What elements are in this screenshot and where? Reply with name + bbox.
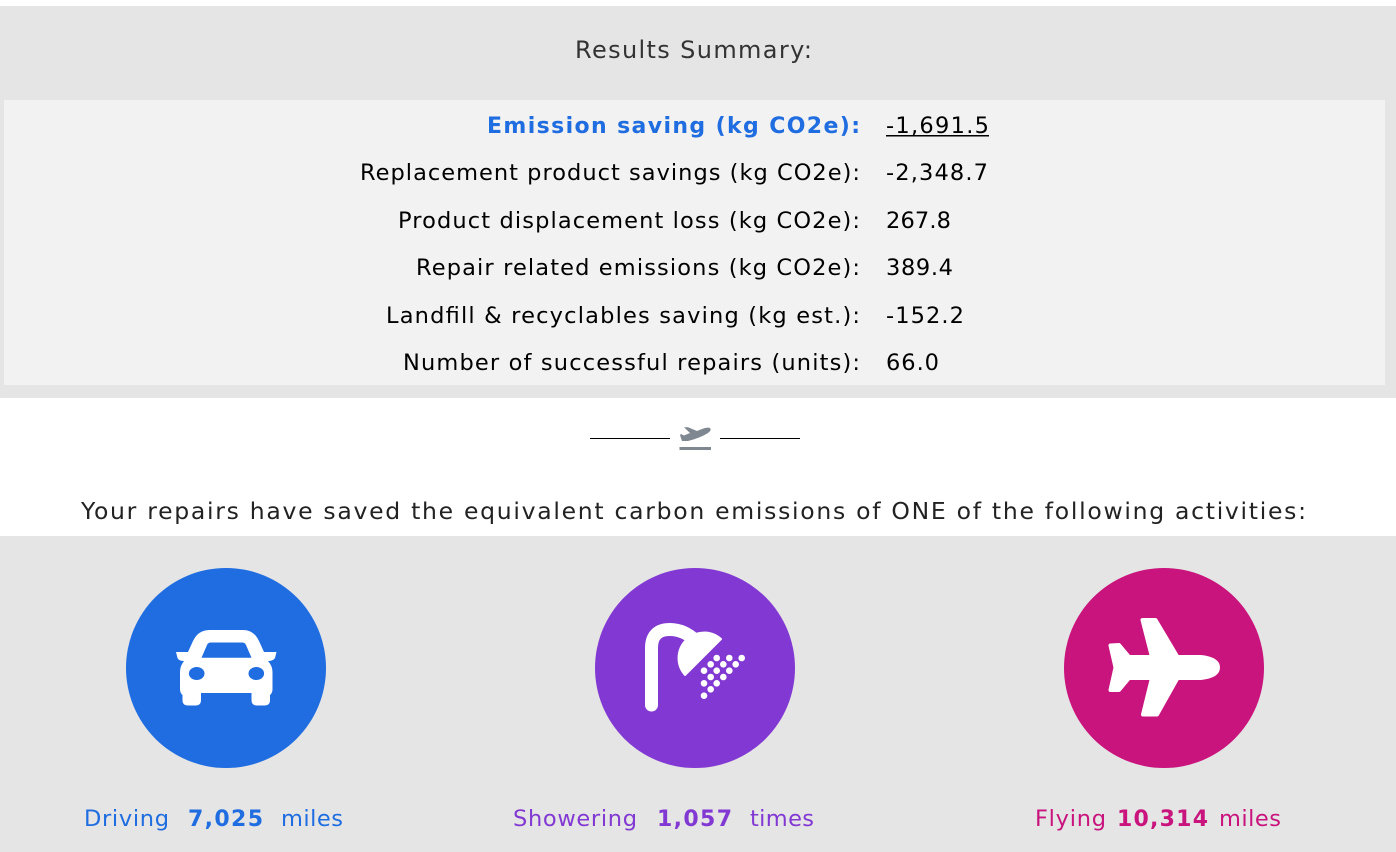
panel: equivalent activities xyxy=(0,536,1396,852)
row: emission saving: -1,691.5 xyxy=(886,113,989,139)
row: landfill and recyclables saving: -152.2 xyxy=(886,303,964,329)
panel: results table xyxy=(4,100,1385,385)
heading: results summary: Results Summary: xyxy=(575,36,812,64)
label: showering times xyxy=(513,806,814,832)
label: driving miles: miles xyxy=(281,806,343,832)
icon: car xyxy=(126,568,326,768)
row: number of successful repairs: 66.0 xyxy=(886,350,939,376)
activity: driving xyxy=(84,568,343,832)
label: driving miles: 7,025 xyxy=(188,807,263,832)
label: driving miles: Driving xyxy=(84,806,169,832)
icon: takeoff plane xyxy=(680,427,711,450)
icon: plane xyxy=(1064,568,1264,768)
label: showering times: Showering xyxy=(513,806,637,832)
row: landfill and recyclables saving: Landfill & recyclables saving (kg est.): xyxy=(386,303,860,329)
row: replacement product savings: -2,348.7 xyxy=(886,160,988,186)
text: equivalent activities intro: Your repairs have saved the equivalent carbon emissions of ONE of the following activities: xyxy=(80,497,1306,525)
label: flying miles: miles xyxy=(1219,806,1281,832)
icon: shower xyxy=(595,568,795,768)
label: flying miles: 10,314 xyxy=(1117,807,1208,832)
divider with takeoff icon xyxy=(590,427,800,450)
activity: flying xyxy=(1035,568,1281,832)
row: number of successful repairs: Number of successful repairs (units): xyxy=(403,350,860,376)
label: flying miles xyxy=(1035,806,1281,832)
row: repair related emissions: 389.4 xyxy=(886,255,953,281)
row: replacement product savings: Replacement product savings (kg CO2e): xyxy=(360,160,860,186)
row: emission saving: Emission saving (kg CO2e): xyxy=(487,114,860,139)
row: repair related emissions: Repair related emissions (kg CO2e): xyxy=(416,255,860,281)
panel: results summary xyxy=(0,6,1396,398)
label: showering times: times xyxy=(750,806,814,832)
label: flying miles: Flying xyxy=(1035,806,1106,832)
label: showering times: 1,057 xyxy=(657,807,732,832)
label: driving miles xyxy=(84,806,343,832)
row: product displacement loss: 267.8 xyxy=(886,208,951,234)
row: product displacement loss: Product displacement loss (kg CO2e): xyxy=(398,208,860,234)
activity: showering xyxy=(513,568,814,832)
